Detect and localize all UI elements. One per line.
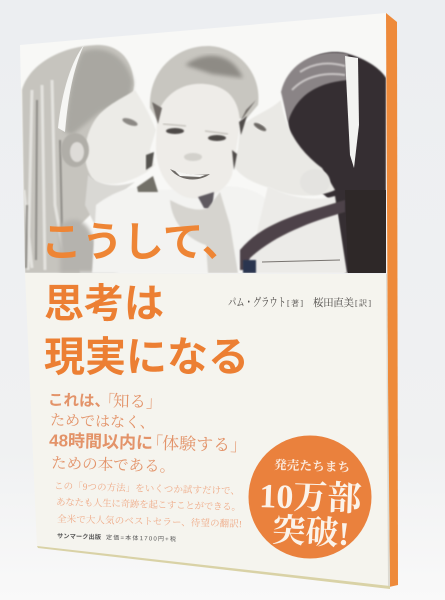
badge: 100,000 copies sold bbox=[248, 436, 372, 558]
title: second line: 思考は bbox=[44, 282, 164, 326]
author and translator: [著] bbox=[287, 298, 303, 308]
badge: 100,000 copies sold: 10万部 bbox=[259, 477, 362, 519]
tagline: 体験する bbox=[162, 434, 230, 455]
description text bbox=[54, 480, 242, 530]
scarf bbox=[240, 200, 345, 270]
nose shadow bbox=[184, 153, 202, 161]
tagline: ためではなく、 bbox=[50, 412, 155, 432]
tagline: 「 bbox=[99, 392, 115, 411]
publisher and price: サンマーク出版 bbox=[57, 532, 102, 541]
description text: この「9つの方法」をいくつか試すだけで、 bbox=[54, 480, 240, 497]
author and translator bbox=[228, 296, 371, 309]
boy bbox=[137, 46, 258, 210]
right girl's neck and dress bbox=[245, 186, 347, 273]
eyes bbox=[166, 128, 184, 134]
author and translator: パム・グラウト bbox=[228, 296, 286, 309]
left girl dress bbox=[60, 220, 118, 273]
description text: 全米で大人気のベストセラー、待望の翻訳! bbox=[57, 513, 242, 530]
left girl bbox=[22, 45, 156, 273]
smile bbox=[170, 169, 210, 179]
publisher and price: 定価=本体1700円+税 bbox=[106, 533, 176, 543]
publisher and price bbox=[57, 532, 176, 543]
title: first line: こうして、 bbox=[41, 219, 243, 265]
badge: 100,000 copies sold: 発売たちまち bbox=[274, 457, 350, 475]
child's hand on chin bbox=[170, 192, 238, 273]
tagline: ための本である。 bbox=[51, 454, 175, 476]
band edge highlight bbox=[386, 274, 390, 587]
author and translator: [訳] bbox=[355, 299, 371, 308]
right girl bbox=[232, 52, 386, 273]
badge: 100,000 copies sold: 突破! bbox=[272, 512, 350, 553]
boy's collar shadow bbox=[137, 176, 158, 192]
tagline: 知る bbox=[113, 391, 146, 411]
headband bbox=[58, 45, 84, 132]
photo area of the cover bbox=[18, 12, 387, 275]
author and translator: 桜田直美 bbox=[313, 296, 354, 309]
bottom cover edge bbox=[37, 546, 390, 589]
description text: あなたも人生に奇跡を起こすことができる。 bbox=[56, 496, 241, 513]
tagline: これは、 bbox=[48, 391, 110, 410]
tagline: 48時間以内に bbox=[49, 431, 153, 453]
tagline: 」 bbox=[230, 436, 247, 455]
title: third line: 現実になる bbox=[44, 334, 249, 380]
orange spine bbox=[386, 13, 398, 587]
boy's shirt bbox=[92, 190, 124, 273]
tagline bbox=[48, 390, 247, 476]
tagline: 」 bbox=[146, 394, 162, 412]
obi band bbox=[25, 273, 390, 587]
tagline: 「 bbox=[146, 434, 163, 453]
